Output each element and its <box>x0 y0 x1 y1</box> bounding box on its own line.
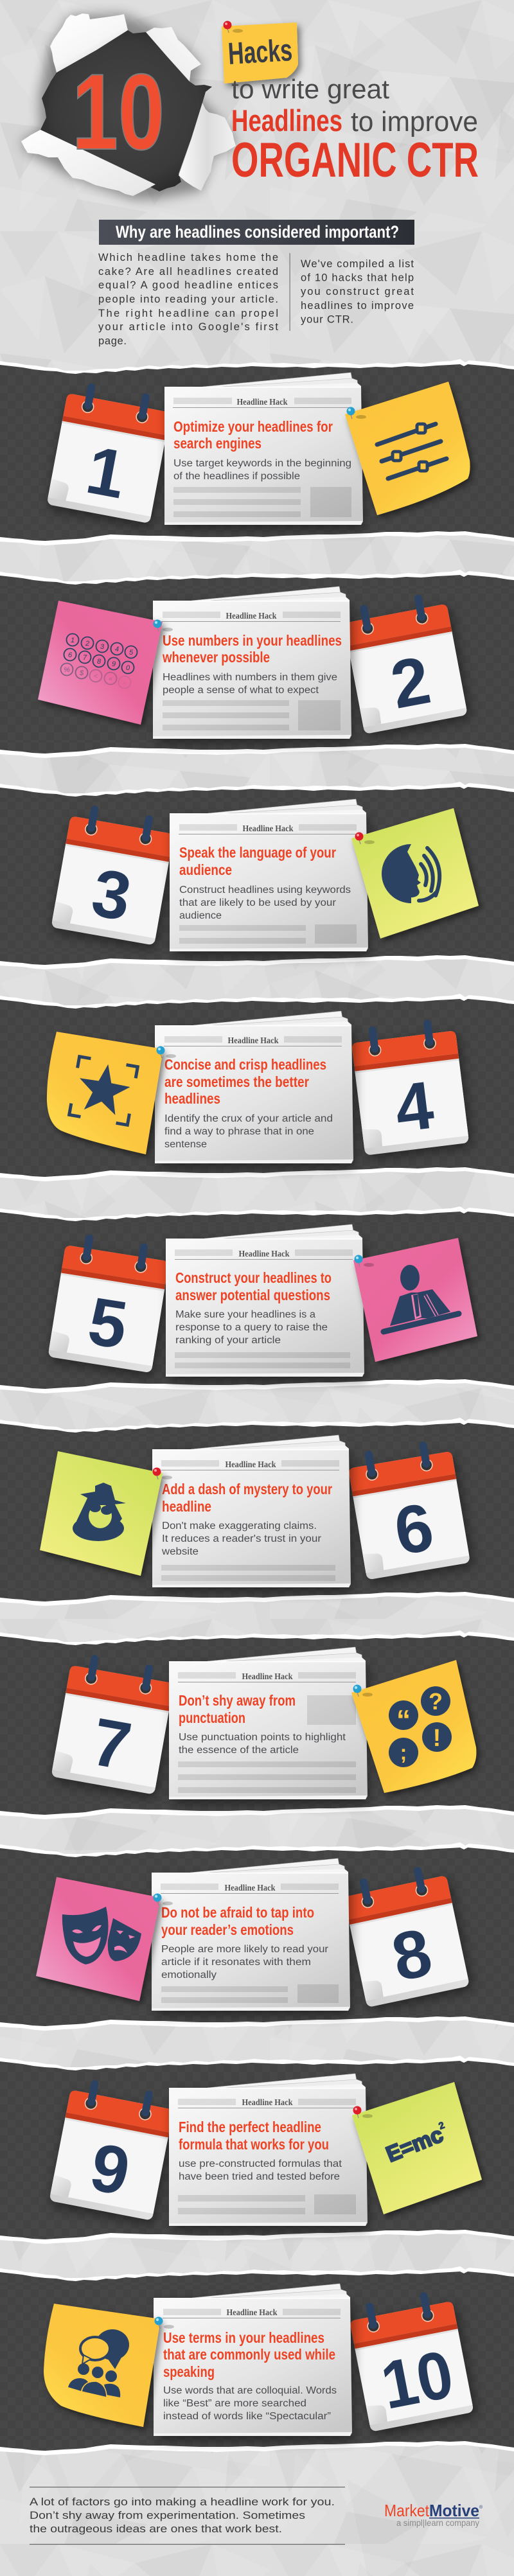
closing note: Don’t shy away from experimentation. Sometimes <box>30 2509 305 2521</box>
calendar 7 <box>50 1651 179 1799</box>
big number 10: 10 <box>72 51 164 172</box>
title text <box>231 74 479 188</box>
intro paragraph left <box>98 252 278 347</box>
dark band 10 <box>0 2266 514 2455</box>
logo: MarketMotive: a simpl|learn company <box>396 2518 479 2528</box>
torn flap: bottom left <box>21 130 155 196</box>
newspaper 10: like “Best” are more searched <box>163 2398 306 2409</box>
calendar 9: 9 <box>85 2130 136 2210</box>
newspaper 1: of the headlines if possible <box>173 471 300 482</box>
torn flap: right <box>179 103 236 191</box>
sticky note 2: numbers icon: $ <box>79 669 84 677</box>
newspaper 4 <box>155 1011 355 1168</box>
newspaper 3: audience <box>179 910 222 921</box>
closing note: the outrageous ideas are ones that work best. <box>30 2523 282 2535</box>
hack 9 panel <box>48 2074 482 2230</box>
sticky note 2: numbers icon: 3 <box>100 643 105 651</box>
dark band 6 <box>0 1418 514 1606</box>
calendar 5: 5 <box>84 1284 132 1364</box>
newspaper 4: find a way to phrase that in one <box>164 1126 314 1137</box>
hero illustration: torn hole with 10 <box>21 13 236 199</box>
calendar 4: 4 <box>391 1068 438 1147</box>
newspaper 9: Headline Hack <box>242 2098 293 2108</box>
sticky note 5: speaker icon <box>353 1238 477 1362</box>
newspaper 10 <box>154 2284 353 2440</box>
sticky note 2: numbers icon: 4 <box>115 646 119 653</box>
torn flap: top left <box>50 13 128 73</box>
logo: MarketMotive: Motive <box>429 2501 479 2520</box>
dark band 4 <box>0 994 514 1181</box>
newspaper 1: search engines <box>173 435 261 452</box>
newspaper 7: Headline Hack <box>242 1672 293 1682</box>
sticky note 2: numbers icon: » <box>123 679 127 687</box>
calendar 10 <box>347 2287 477 2437</box>
newspaper 10: that are commonly used while <box>163 2346 335 2363</box>
newspaper 8 <box>152 1858 351 2015</box>
newspaper 6: Headline Hack <box>225 1460 276 1470</box>
calendar 5 <box>47 1231 173 1378</box>
newspaper 10: Headline Hack <box>226 2308 278 2318</box>
intro paragraph right: you construct great <box>301 286 414 297</box>
intro paragraph left: The right headline can propel <box>98 308 278 319</box>
heading bar: Why are headlines considered important?: Why are headlines considered important? <box>116 222 399 242</box>
newspaper 9: Find the perfect headline <box>179 2119 321 2135</box>
newspaper 1: Optimize your headlines for <box>173 418 333 435</box>
calendar 1: 1 <box>81 432 132 513</box>
newspaper 4: Identify the crux of your article and <box>164 1113 333 1124</box>
calendar 1 <box>46 379 175 529</box>
sticky note 4: star icon <box>47 1032 176 1154</box>
dark band 5 <box>0 1206 514 1393</box>
newspaper 2: whenever possible <box>162 649 270 666</box>
sticky note 10: conversation icon <box>44 2304 174 2427</box>
newspaper 4: Headline Hack <box>227 1036 279 1046</box>
intro paragraph right: of 10 hacks that help <box>301 272 414 284</box>
newspaper 3: audience <box>179 861 232 878</box>
sticky note 2: numbers icon <box>38 601 173 725</box>
newspaper 5: Headline Hack <box>239 1249 290 1259</box>
title text: to write great <box>231 74 389 104</box>
logo: MarketMotive: Market <box>384 2501 430 2520</box>
intro paragraph left: your article into Google's first <box>98 321 278 333</box>
calendar 10: 10 <box>375 2336 459 2424</box>
sticky note 9: E=mc2 <box>352 2082 482 2214</box>
newspaper 5 <box>166 1224 366 1381</box>
sticky note 2: numbers icon: 1 <box>71 637 75 644</box>
newspaper 9: have been tried and tested before <box>179 2171 340 2182</box>
calendar 6: 6 <box>389 1489 439 1569</box>
intro paragraph left: people into reading your article. <box>98 294 278 305</box>
sticky note 2: numbers icon: 7 <box>83 654 87 662</box>
newspaper 2: Headlines with numbers in them give <box>163 672 337 683</box>
closing note: A lot of factors go into making a headline work for you. <box>30 2496 335 2508</box>
newspaper 3: that are likely to be used by your <box>179 897 336 908</box>
newspaper 10: instead of words like “Spectacular” <box>163 2411 331 2422</box>
intro paragraph left: equal? A good headline entices <box>98 279 278 291</box>
newspaper 6: Don't make exaggerating claims. <box>162 1521 317 1531</box>
newspaper 4: sentense <box>164 1139 207 1150</box>
newspaper 10: Use terms in your headlines <box>163 2329 324 2346</box>
newspaper 7: Don’t shy away from <box>179 1692 296 1709</box>
sticky note 2: numbers icon: 2 <box>85 640 89 648</box>
title text: Headlines <box>231 103 342 137</box>
intro paragraph left: page. <box>98 335 127 347</box>
newspaper 5: answer potential questions <box>175 1287 330 1303</box>
newspaper 6: It reduces a reader's trust in your <box>162 1533 321 1544</box>
calendar 4 <box>350 1016 472 1160</box>
newspaper 3 <box>170 799 369 956</box>
hack 2 panel <box>38 587 471 743</box>
intro paragraph right: We've compiled a list <box>301 258 414 270</box>
calendar 2: 2 <box>385 642 436 723</box>
newspaper 6 <box>152 1435 352 1592</box>
newspaper 2: Use numbers in your headlines <box>163 632 342 649</box>
torn hole <box>40 30 212 191</box>
newspaper 1 <box>164 373 364 529</box>
word: Hacks: Hacks <box>227 33 293 71</box>
newspaper 7: the essence of the article <box>179 1745 299 1756</box>
hack 4 panel <box>47 1011 472 1168</box>
sticky note 2: numbers icon: % <box>64 666 70 674</box>
hack 1 panel <box>46 373 470 529</box>
newspaper 3: Construct headlines using keywords <box>179 885 351 895</box>
intro paragraph left: Which headline takes home the <box>98 252 278 263</box>
newspaper 6: headline <box>162 1498 211 1515</box>
sticky note 1: sliders icon <box>345 382 470 515</box>
logo: MarketMotive <box>384 2501 483 2528</box>
sticky note 7: punctuation icons <box>351 1660 476 1793</box>
calendar 6 <box>346 1436 474 1584</box>
calendar 7: 7 <box>87 1704 136 1785</box>
heading bar: Why are headlines considered important? <box>99 220 414 245</box>
newspaper 1: Headline Hack <box>236 398 288 407</box>
sticky note 7: punctuation icons: “ <box>396 1704 411 1736</box>
newspaper 5: response to a query to raise the <box>175 1322 328 1333</box>
newspaper 8: emotionally <box>161 1970 217 1981</box>
newspaper 9 <box>169 2074 369 2230</box>
intro paragraph right: your CTR. <box>301 313 353 325</box>
newspaper 2: Headline Hack <box>226 612 277 621</box>
dark band 1 <box>0 359 514 545</box>
closing note <box>30 2487 345 2545</box>
newspaper 2 <box>153 587 353 743</box>
calendar 8 <box>341 1861 473 2012</box>
sticky note 9: E=mc2: 2 <box>437 2120 447 2132</box>
newspaper 8: People are more likely to read your <box>161 1944 328 1955</box>
newspaper 5: Make sure your headlines is a <box>175 1309 315 1320</box>
newspaper 7: Use punctuation points to highlight <box>179 1732 346 1743</box>
intro paragraph right <box>301 258 414 325</box>
newspaper 10: Use words that are colloquial. Words <box>163 2385 337 2396</box>
calendar 2 <box>341 589 471 739</box>
newspaper 7 <box>169 1647 369 1804</box>
title text: to improve <box>351 106 478 137</box>
newspaper 3: Headline Hack <box>243 824 294 834</box>
sticky note 8: theatre masks icon <box>36 1877 173 2001</box>
sticky note 2: numbers icon: 0 <box>126 664 130 672</box>
sticky note 2: numbers icon: 6 <box>68 651 73 659</box>
sticky note 7: punctuation icons: ? <box>429 1688 443 1715</box>
newspaper 9: use pre-constructed formulas that <box>179 2158 342 2169</box>
hack 3 panel <box>50 799 479 956</box>
hack 8 panel <box>36 1858 473 2015</box>
newspaper 1: Use target keywords in the beginning <box>173 458 351 469</box>
sticky note 9: E=mc2: E=mc <box>383 2122 447 2167</box>
newspaper 6: Add a dash of mystery to your <box>162 1481 332 1497</box>
sticky note 7: punctuation icons: ! <box>433 1725 441 1752</box>
sticky note 2: numbers icon: 9 <box>112 660 116 668</box>
hack 5 panel <box>47 1224 477 1381</box>
dark band 9 <box>0 2056 514 2244</box>
hack 7 panel <box>50 1647 476 1804</box>
newspaper 8: article if it resonates with them <box>161 1957 311 1968</box>
newspaper 5: ranking of your article <box>175 1335 281 1346</box>
dark band 7 <box>0 1630 514 1819</box>
dark band 2 <box>0 570 514 758</box>
intro paragraph left: cake? Are all headlines created <box>98 266 278 278</box>
sticky note 2: numbers icon: 8 <box>97 658 102 666</box>
sticky note 6: spy icon <box>40 1451 172 1576</box>
calendar 3: 3 <box>87 855 136 935</box>
torn flap: top right <box>146 27 201 82</box>
calendar 3 <box>50 802 179 950</box>
newspaper 8: Do not be afraid to tap into <box>161 1904 314 1921</box>
newspaper 6: website <box>161 1546 199 1557</box>
newspaper 10: speaking <box>163 2363 215 2380</box>
newspaper 7: punctuation <box>179 1709 245 1726</box>
newspaper 8: your reader’s emotions <box>161 1921 294 1938</box>
calendar 8: 8 <box>386 1914 438 1996</box>
intro paragraph right: headlines to improve <box>301 300 414 312</box>
newspaper 3: Speak the language of your <box>179 844 336 861</box>
newspaper 4: headlines <box>164 1090 220 1107</box>
newspaper 8: Headline Hack <box>225 1883 276 1893</box>
newspaper 5: Construct your headlines to <box>175 1269 332 1286</box>
sticky note 2: numbers icon: « <box>109 675 113 683</box>
newspaper 4: Concise and crisp headlines <box>164 1056 326 1073</box>
newspaper 4: are sometimes the better <box>164 1073 309 1090</box>
sticky note: Hacks <box>222 21 298 84</box>
sticky note 2: numbers icon: < <box>94 673 98 680</box>
sticky note 7: punctuation icons: ; <box>400 1741 407 1764</box>
dark band 3 <box>0 782 514 969</box>
hack 6 panel <box>40 1435 474 1592</box>
dark band 8 <box>0 1842 514 2031</box>
sticky note 2: numbers icon: 5 <box>129 649 134 657</box>
sticky note 3: speaking head icon <box>351 808 479 939</box>
hack 10 panel <box>44 2284 477 2440</box>
newspaper 2: people a sense of what to expect <box>163 685 319 696</box>
calendar 9 <box>48 2076 179 2226</box>
logo: MarketMotive: ® <box>479 2505 483 2510</box>
newspaper 9: formula that works for you <box>179 2136 329 2153</box>
